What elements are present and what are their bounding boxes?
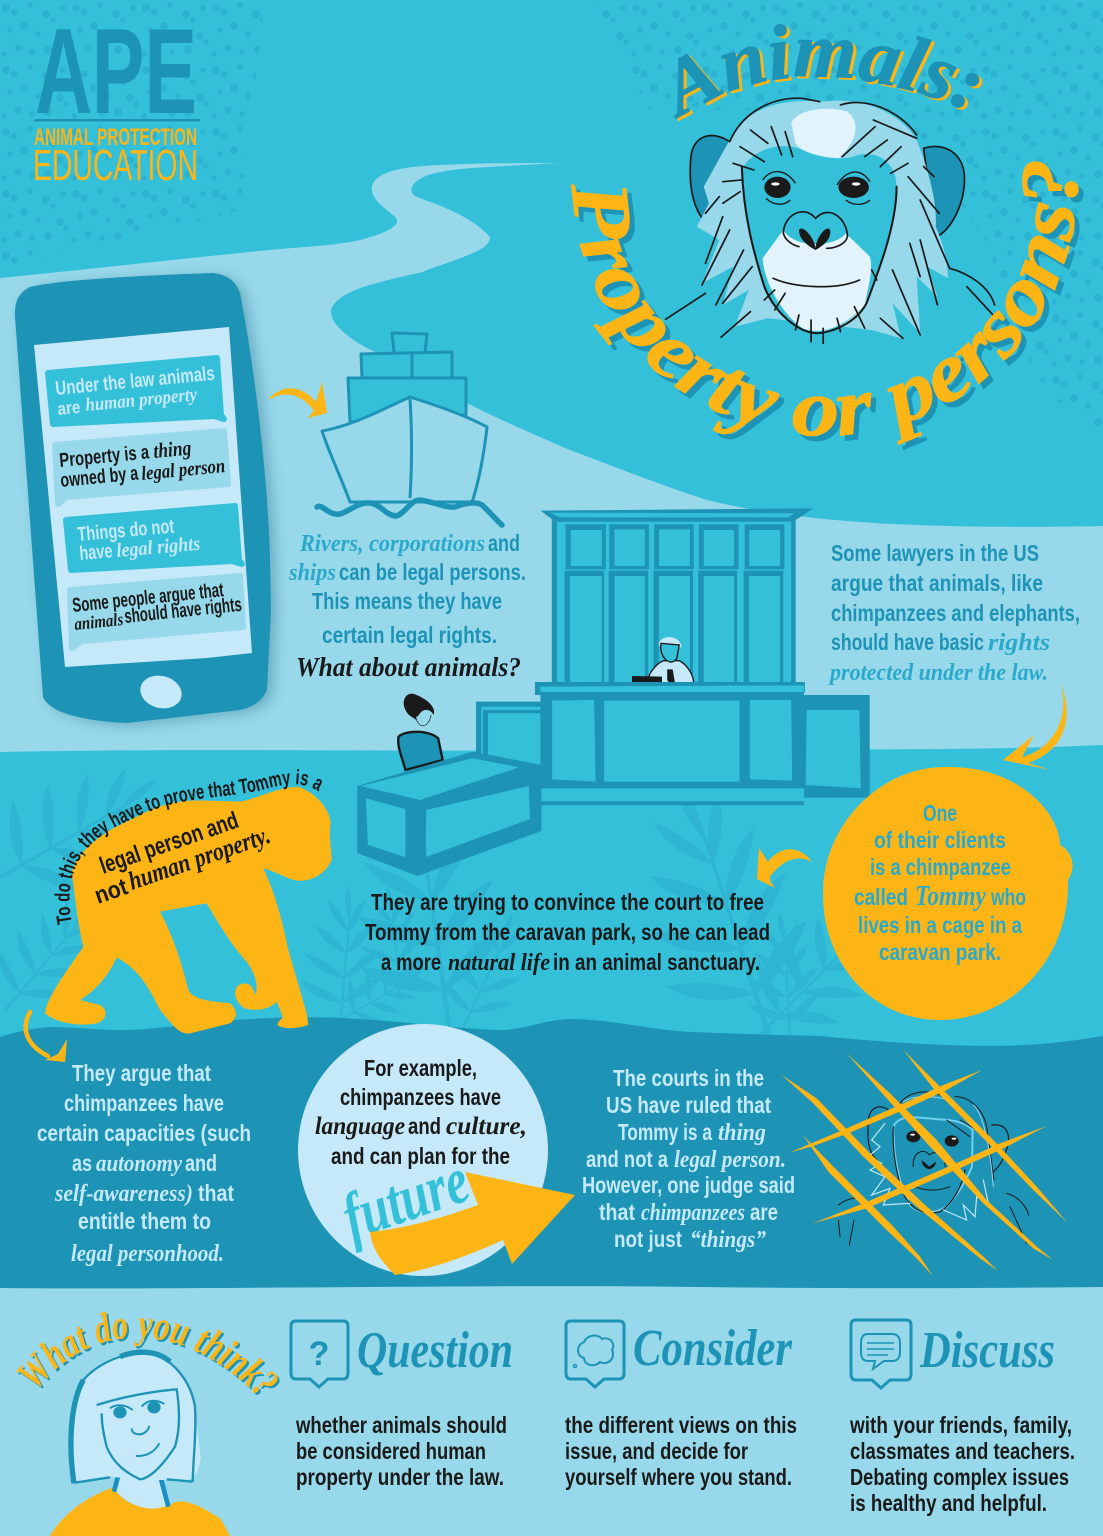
wall panelling — [540, 508, 814, 687]
text: courts ruled: US have ruled that — [606, 1092, 771, 1118]
chat bubble 1 — [48, 358, 224, 424]
text: rivers, corporations and ships: certain legal rights. — [322, 622, 497, 648]
ship top deck — [392, 333, 427, 352]
ship hull — [322, 397, 487, 502]
chat bubble 4: animals — [73, 609, 124, 634]
ship wave — [317, 500, 502, 525]
text: capacities: self-awareness) — [54, 1181, 193, 1207]
text: capacities: legal personhood. — [71, 1241, 224, 1267]
panel: Consider — [565, 1320, 797, 1490]
heading: Consider — [633, 1320, 793, 1377]
convince lines: They are trying to convince the court to free — [371, 889, 764, 915]
chimp line drawing — [838, 1092, 1028, 1245]
forehead — [791, 109, 856, 158]
courts lines: The courts in the — [613, 1065, 764, 1091]
pale circle: for example: and can plan for the — [331, 1143, 510, 1169]
yellow circle: Tommy the client: Tommy — [915, 881, 986, 912]
face — [742, 146, 897, 333]
panel: Question — [291, 1321, 513, 1490]
text: capacities: and — [185, 1150, 217, 1176]
muzzle — [763, 230, 871, 331]
text: courts ruled: chimpanzees — [641, 1200, 745, 1226]
phone home button — [137, 671, 185, 713]
text: capacities: entitle them to — [78, 1208, 211, 1234]
pale circle: for example: language — [315, 1113, 405, 1140]
yellow circle: Tommy the client — [823, 767, 1073, 1020]
text: courts ruled: However, one judge said — [582, 1172, 795, 1198]
woman with heading — [16, 1312, 280, 1536]
phone screen — [34, 327, 252, 667]
pale circle: for example: and — [408, 1113, 441, 1139]
text: lawyers in the US: argue that animals, like — [831, 570, 1043, 596]
rivers lines: Rivers, corporations — [299, 531, 485, 557]
logo letters: APE — [35, 3, 197, 139]
background: light river and land band — [0, 163, 1103, 752]
arrow: lawyers to yellow circle — [1003, 682, 1067, 770]
caged chimpanzee — [782, 1050, 1067, 1276]
text: lawyers in the US: should have basic — [831, 629, 984, 655]
arrow: phone to ship — [268, 382, 327, 418]
text: courts ruled: “things” — [690, 1227, 766, 1253]
chimpanzee portrait — [666, 98, 995, 343]
text: courts ruled — [582, 1065, 795, 1253]
chat bubble 1: human property — [84, 384, 198, 416]
text: whether animals should — [295, 1412, 507, 1438]
text: not human property — [91, 820, 274, 910]
ship lower deck — [348, 378, 466, 422]
chat bubble 3 — [66, 506, 242, 570]
text: capacities: chimpanzees have — [64, 1090, 224, 1116]
text — [565, 1412, 797, 1490]
icon: question bubble: ? — [309, 1335, 329, 1373]
text: rivers, corporations and ships: and — [488, 530, 520, 556]
circle — [823, 767, 1073, 1020]
lawyers lines: Some lawyers in the US — [831, 540, 1039, 566]
text: rivers, corporations and ships: ships — [288, 560, 336, 586]
background: teal floor band — [0, 745, 1103, 1060]
text — [849, 1412, 1075, 1516]
face outline and fur strokes — [666, 98, 995, 343]
text: courts ruled: that — [599, 1199, 635, 1225]
phone body — [15, 273, 271, 723]
chat bubble 3: legal rights — [116, 533, 201, 562]
judge's bench side panels — [476, 695, 870, 798]
hair — [697, 101, 948, 338]
text: be considered human — [296, 1438, 486, 1464]
ears — [690, 136, 965, 237]
text: rivers, corporations and ships: What about animals? — [296, 652, 521, 682]
arrow head — [45, 1039, 67, 1062]
yellow circle: Tommy the client: lives in a cage in a — [858, 912, 1023, 938]
chimp eyes and nose — [906, 1131, 959, 1169]
text: courts ruled: legal person. — [674, 1147, 786, 1173]
background: tropical leaves — [0, 732, 923, 1071]
text: courts ruled: and not a — [586, 1146, 669, 1172]
text: capacities: that — [198, 1180, 234, 1206]
text: capacities: autonomy — [96, 1151, 182, 1177]
pale circle: for example: For example, — [364, 1055, 477, 1081]
clerk's desk — [357, 752, 541, 876]
text: capacities: as — [72, 1150, 92, 1176]
text: property under the law. — [296, 1464, 504, 1490]
ape silhouette — [45, 787, 332, 1033]
chat bubble 4 — [70, 576, 243, 648]
text: courts ruled: thing — [718, 1120, 766, 1146]
chat bubble 2 — [55, 431, 228, 504]
heading: Question — [357, 1322, 513, 1379]
clerk — [398, 694, 443, 770]
circle — [298, 1024, 548, 1276]
phone — [15, 273, 271, 723]
arrow: circle to text — [757, 848, 812, 888]
yellow circle: Tommy the client: of their clients — [874, 827, 1006, 853]
chat bubble 2: legal person — [140, 455, 226, 485]
title: Property or persons?: Property or persons? — [570, 161, 1084, 450]
text: curved over ape: To do this, they have to prove that Tommy is a — [54, 769, 322, 925]
text: lawyers in the US — [828, 540, 1080, 686]
ship middle deck — [361, 352, 452, 378]
text: legal person: legal person and — [96, 807, 242, 880]
background: bottom light band — [0, 1286, 1103, 1536]
chat bubble 2: Property is a — [58, 441, 151, 472]
text: convince the court: in an animal sanctuary. — [553, 949, 760, 975]
text: convince the court: Tommy from the caravan park, so he can lead — [365, 919, 770, 945]
text: issue, and decide for — [565, 1438, 748, 1464]
judge — [632, 637, 694, 689]
text: convince the court: a more — [381, 949, 441, 975]
arrow: future — [370, 1172, 575, 1275]
text: convince the court — [365, 889, 770, 976]
logo: APE Animal Protection Education: ANIMAL PROTECTION — [34, 124, 197, 151]
capacities lines: They argue that — [72, 1060, 211, 1086]
icon: question bubble — [291, 1321, 348, 1387]
text: rivers, corporations and ships — [288, 530, 526, 682]
text: not human property: human property. — [125, 820, 274, 896]
chat bubble 3: have — [79, 540, 113, 565]
text: courts ruled: not just — [614, 1226, 682, 1252]
heading: Discuss — [919, 1322, 1055, 1379]
chat bubble 1: are — [56, 397, 81, 419]
title: Animals:: Animals: — [674, 24, 982, 122]
heading: What do you think?: What do you think? — [16, 1312, 280, 1395]
text: the different views on this — [565, 1412, 797, 1438]
text: is healthy and helpful. — [850, 1490, 1047, 1516]
pale circle: for example: future — [333, 1143, 478, 1254]
text: lawyers in the US: protected under the law. — [828, 660, 1048, 686]
text: courts ruled: Tommy is a — [618, 1119, 713, 1145]
pale circle: for example — [298, 1024, 548, 1276]
cage bars — [782, 1050, 1067, 1276]
chat bubble 4: should have rights — [123, 594, 243, 628]
yellow circle: Tommy the client: called — [854, 884, 908, 910]
arrow: ape to capacities — [26, 1012, 67, 1062]
arrow shaft — [26, 1012, 48, 1056]
text — [295, 1412, 507, 1490]
text: courts ruled: are — [750, 1199, 778, 1225]
not: not — [91, 873, 131, 910]
text: capacities — [37, 1060, 251, 1267]
courtroom — [357, 508, 870, 876]
logo: APE Animal Protection Education — [33, 3, 200, 190]
icon: speech bubble — [851, 1320, 911, 1388]
text: rivers, corporations and ships: can be legal persons. — [339, 559, 526, 585]
logo: APE Animal Protection Education: EDUCATION — [33, 141, 198, 190]
eyes and nostrils — [764, 177, 869, 250]
background: speckled texture — [0, 0, 1103, 430]
background: dark band — [0, 1017, 1103, 1292]
text: convince the court: natural life — [448, 950, 550, 976]
chat bubble 2: thing — [152, 435, 192, 463]
chat bubble 3: Things do not — [77, 516, 175, 546]
pale circle: for example: culture, — [446, 1113, 527, 1140]
icon: thought bubble — [566, 1321, 624, 1387]
text: lawyers in the US: rights — [988, 630, 1050, 656]
panel: Discuss — [849, 1320, 1075, 1516]
chat bubble 2: owned by a — [59, 463, 140, 492]
text: rivers, corporations and ships: This means they have — [312, 588, 502, 614]
yellow circle: Tommy the client: who — [990, 884, 1026, 910]
yellow circle: Tommy the client: is a chimpanzee — [870, 854, 1011, 880]
yellow circle: Tommy the client: caravan park. — [879, 939, 1001, 965]
text: yourself where you stand. — [565, 1464, 792, 1490]
woman — [50, 1351, 230, 1536]
ship — [317, 333, 502, 525]
yellow circle: Tommy the client: One — [923, 800, 957, 826]
pale circle: for example: chimpanzees have — [340, 1084, 501, 1110]
judge's bench — [535, 682, 805, 805]
chat bubble 4: Some people argue that — [71, 579, 225, 617]
chat bubble 1: Under the law animals — [54, 363, 216, 400]
text: capacities: certain capacities (such — [37, 1120, 251, 1146]
